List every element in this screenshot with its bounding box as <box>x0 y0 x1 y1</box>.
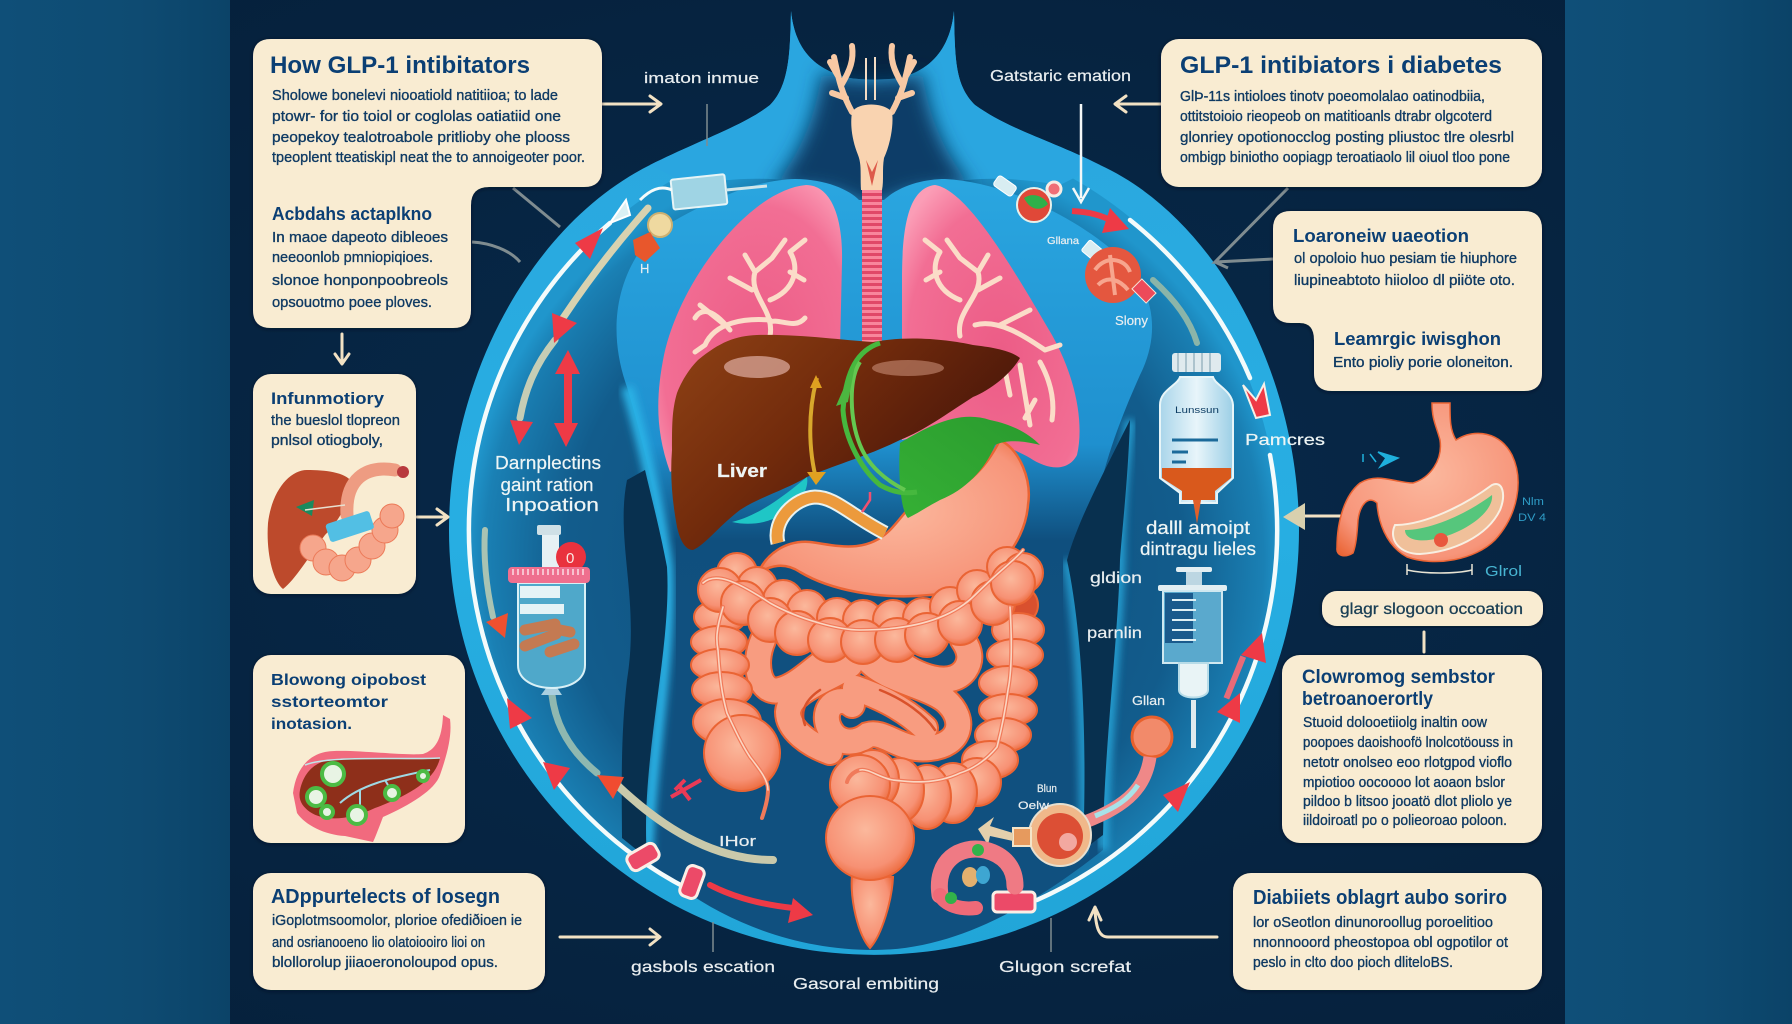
label: small bile <box>1018 783 1057 812</box>
label: dose text <box>1140 518 1256 559</box>
label: liver: Liver <box>717 461 767 481</box>
heading: Infunmotiory <box>271 389 385 408</box>
icon: stomach cross-section <box>1337 403 1518 562</box>
lung bronchi <box>695 240 1060 425</box>
label: gastral emptying: Gasoral embiting <box>793 976 939 993</box>
pathway capsules <box>625 841 1035 912</box>
label: left centre block: Darnplectins <box>495 453 601 473</box>
label: small bile: Blun <box>1037 783 1057 795</box>
body text: the bueslol tlopreon <box>271 412 400 429</box>
icon: liver cross-section with green cells <box>293 715 451 842</box>
body text: ombigp biniotho oopiagp teroatiaolo lil oiuol tloo pone <box>1180 149 1510 166</box>
connector arrows <box>335 96 1424 945</box>
red arrowheads <box>486 228 1266 812</box>
body text: glonriey opotionocclog posting pliustoc tlre olesrbl <box>1180 129 1514 146</box>
label: stomach side note: DV 4 <box>1518 512 1546 524</box>
large intestine <box>691 547 1044 948</box>
left medicine jar <box>508 525 590 688</box>
body text: poopoes daoishoofö lnolcotöouss in <box>1303 734 1513 751</box>
body text: tpeoplent tteatiskipl neat the to annoigeoter poor. <box>272 149 585 166</box>
label: small bile: Oelw <box>1018 800 1049 812</box>
body text: peopekoy tealotroabole pritlioby ohe plooss <box>272 129 570 146</box>
sub body text: opsouotmo poee ploves. <box>272 294 432 311</box>
pink curved pancreas organ <box>939 844 1015 908</box>
panel: inflammatory <box>253 374 416 594</box>
body silhouette with circular diagram <box>449 11 1299 955</box>
green gallbladder organ <box>899 417 1040 518</box>
white circular pathway <box>469 220 1277 900</box>
body text: and osrianooeno lio olatoiooiro lioi on <box>272 934 485 951</box>
brain stem and antler shaped airway <box>830 46 914 190</box>
arrow head from stomach <box>1283 503 1305 530</box>
label: parnlin: parnlin <box>1087 625 1142 642</box>
icon: cyan chevron <box>1363 452 1398 467</box>
vial label: Lunssun <box>1175 405 1219 415</box>
label: pancreas: Pamcres <box>1245 432 1325 449</box>
heading: GLP-1 intibiators i diabetes <box>1180 52 1502 79</box>
heading: ADppurtelects of losegn <box>271 886 500 908</box>
label: gllana: Gllana <box>1047 236 1079 247</box>
gallbladder and bile duct <box>732 477 885 543</box>
heading: sstorteomtor <box>271 694 388 711</box>
heading <box>1302 667 1496 710</box>
body text: iildoiroatl po o polieoroao poloon. <box>1303 812 1507 829</box>
trachea <box>862 178 882 348</box>
top right capsule and organ <box>993 175 1156 303</box>
body text: pnlsol otiogboly, <box>271 432 383 449</box>
label: glucagon secretion: Glugon screfat <box>999 959 1132 976</box>
right medicine vial <box>1160 353 1233 524</box>
sub body text <box>272 229 448 311</box>
body text: ol opoloio huo pesiam tie hiuphore <box>1294 250 1517 267</box>
body text <box>1180 88 1514 166</box>
panel: adjunctive <box>253 873 545 990</box>
body text: ottitstoioio rieopeob on matitioanls dtrabr olgcoterd <box>1180 108 1492 125</box>
label: gllan lower: Gllan <box>1132 693 1165 708</box>
liver <box>671 335 1020 550</box>
label: top right: Gatstaric emation <box>990 68 1131 85</box>
sub body text: neeoonlob pmniopiqioes. <box>272 249 433 266</box>
body text: peslo in clto doo pioch dliteloBS. <box>1253 954 1453 971</box>
label: gldon: gldion <box>1090 570 1142 587</box>
top left injection device <box>610 174 767 262</box>
panel: how GLP-1 inhibitators <box>253 39 602 328</box>
label: dose text: dintragu lieles <box>1140 539 1256 559</box>
subheading: Leamrgic iwisghon <box>1334 329 1501 349</box>
panel: diabetes <box>1233 873 1542 990</box>
label: dose text: dalll amoipt <box>1146 518 1250 538</box>
heading: betroanoerortly <box>1302 689 1433 710</box>
body text: lor oSeotlon dinunoroollug poroelitioo <box>1253 914 1493 931</box>
label: left centre block <box>495 453 601 515</box>
label: left centre block: gaint ration <box>500 475 594 495</box>
lungs <box>658 185 1080 472</box>
stomach <box>758 440 1029 596</box>
label: gastric escation: gasbols escation <box>631 959 775 976</box>
label: top left: imaton inmue <box>644 70 759 87</box>
body text <box>1294 250 1517 289</box>
curved red arrow bottom <box>710 885 813 923</box>
body text: liupineabtoto hiioloo dl piiöte oto. <box>1294 272 1515 289</box>
body text: mpiotioo oocoooo lot aoaon bslor <box>1303 774 1505 791</box>
double headed red arrow <box>554 350 580 447</box>
body text: ptowr- for tio toiol or coglolas oatiatiid one <box>272 108 561 125</box>
body text <box>272 87 585 166</box>
body text: pildoo b litsoo jooatö dlot pliolo ye <box>1303 793 1512 810</box>
red small marker <box>671 780 701 800</box>
sub body text: slonoe honponpoobreols <box>272 272 448 289</box>
label: h: H <box>640 261 649 276</box>
panel: blowing <box>253 655 465 843</box>
white down arrow <box>1073 104 1089 202</box>
body text: netotr onolseo eoo rlotgpod vioflo <box>1303 754 1512 771</box>
heading: Clowromog sembstor <box>1302 667 1496 688</box>
subheading: Acbdahs actaplkno <box>272 204 432 224</box>
heading: Loaroneiw uaeotion <box>1293 226 1469 246</box>
heading: Blowong oipobost <box>271 672 427 689</box>
label: left centre block: Inpoation <box>505 495 599 515</box>
body text <box>1253 914 1509 971</box>
right syringe <box>1158 567 1227 748</box>
heading: inotasion. <box>271 716 352 733</box>
body text <box>1303 714 1513 829</box>
heading <box>271 672 427 733</box>
curved red arrow top right <box>1072 208 1129 233</box>
heading: Diabiiets oblagrt aubo soriro <box>1253 887 1507 909</box>
left medicine jar: 0 <box>566 550 574 567</box>
body text: nnonnooord pheostopoa obl ogpotilor ot <box>1253 934 1509 951</box>
body text <box>271 412 400 449</box>
label: girol: Glrol <box>1485 563 1522 580</box>
body text: Sholowe bonelevi niooatiold natitiioa; to lade <box>272 87 558 104</box>
body text <box>272 912 522 971</box>
icon: liver and intestine <box>268 466 409 589</box>
label: ihor: IHor <box>719 833 756 850</box>
green bile ducts and yellow arrow <box>807 343 917 493</box>
body text: blollorolup jiiaoeronoloupod opus. <box>272 954 498 971</box>
heading: How GLP-1 intibitators <box>270 52 530 79</box>
panel: clowromog <box>1282 655 1542 843</box>
grey leader lines <box>472 104 1288 952</box>
panel: learning uaection <box>1273 211 1542 391</box>
bottom right bile tube and lens organ <box>978 717 1172 866</box>
panel: GLP-1 in diabetes <box>1161 39 1542 187</box>
pill label: glucagon secretion: glagr slogoon occoation <box>1340 601 1523 618</box>
measurement bracket <box>1407 564 1472 575</box>
sub body text: Ento pioliy porie oloneiton. <box>1333 354 1513 371</box>
body text: iGoplotmsoomolor, plorioe ofediðioen ie <box>272 912 522 929</box>
label: slony: Slony <box>1115 313 1148 328</box>
pill label: glucagon secretion <box>1322 591 1543 626</box>
body text: Stuoid dolooetiiolg inaltin oow <box>1303 714 1487 731</box>
label: stomach side note <box>1518 496 1546 524</box>
label: stomach side note: Nlm <box>1522 496 1544 508</box>
body text: GlÞ-11s intioloes tinotv poeomolalao oatinodbiia, <box>1180 88 1485 105</box>
red bent arrow right <box>1243 384 1270 418</box>
small intestine <box>758 640 969 752</box>
beige inner flow arrows <box>484 208 1197 860</box>
sub body text: In maoe dapeoto dibleoes <box>272 229 448 246</box>
